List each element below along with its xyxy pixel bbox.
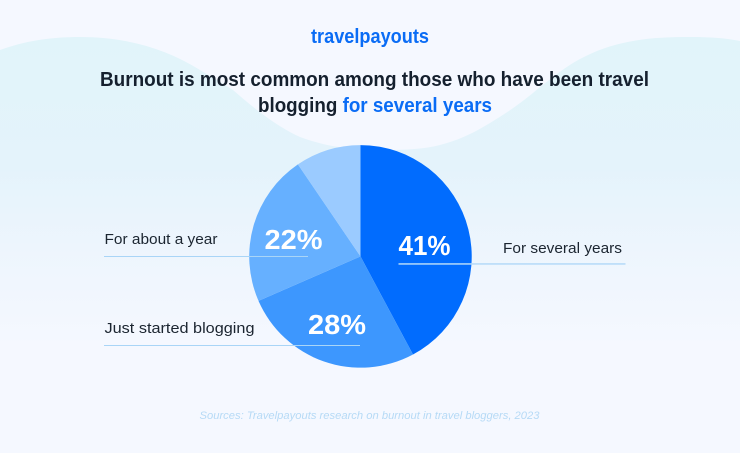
slice: just started blogging 28% [258,256,413,368]
slice: for about a year 22% [249,164,360,301]
leader line: for several years [398,263,626,265]
label: for several years: For several years [503,240,622,257]
percent label 41%: 41% [398,230,451,261]
slice: for several years 41% [360,145,472,354]
pie chart [249,145,472,368]
source note: Sources: Travelpayouts research on burnout in travel bloggers, 2023 [200,410,540,422]
title line 1: Burnout is most common among those who have been travel [100,69,649,91]
label: just started blogging: Just started blogging [104,320,254,337]
background wave [0,37,740,345]
percent label 22%: 22% [264,224,323,255]
label: for about a year: For about a year [104,231,218,248]
slice: remainder [298,145,360,256]
logo: travelpayouts [311,26,429,48]
title line 2: blogging for several years [258,95,492,117]
percent label 28%: 28% [308,309,366,340]
leader line: just started blogging [104,345,360,346]
leader line: for about a year [104,256,308,257]
title [100,69,649,117]
